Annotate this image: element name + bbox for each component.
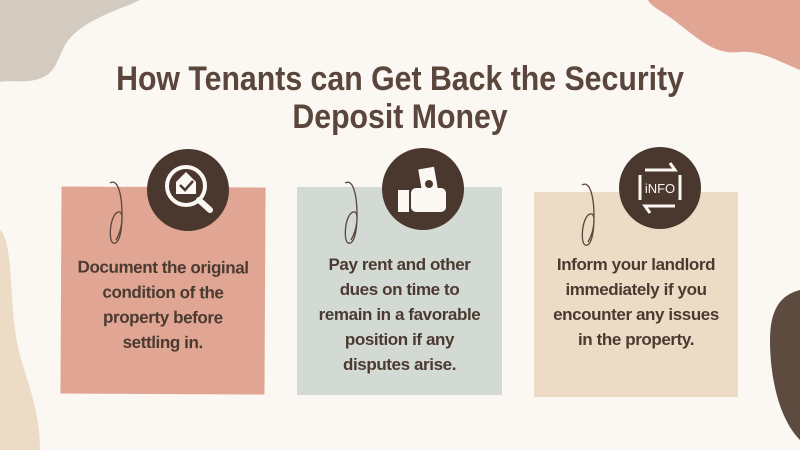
text: document: condition of the	[102, 283, 224, 302]
icon: house magnifier	[147, 149, 229, 231]
text: inform: in the property.	[578, 330, 694, 349]
blob: left beige	[0, 230, 40, 450]
title: Deposit Money	[292, 98, 508, 136]
title: How Tenants can Get Back the Security	[116, 60, 684, 98]
squiggle 1	[110, 182, 122, 243]
squiggle 3	[582, 184, 594, 245]
text: pay rent: disputes arise.	[343, 355, 456, 374]
blob: top-left grey	[0, 0, 140, 82]
icon: hand with money	[382, 148, 464, 230]
text: document: settling in.	[123, 333, 203, 352]
text: inform	[553, 255, 719, 349]
squiggle 2	[345, 182, 357, 243]
text: inform: Inform your landlord	[557, 255, 715, 274]
text: document: property before	[103, 308, 223, 327]
panel: document	[60, 186, 266, 395]
text: pay rent: remain in a favorable	[319, 305, 480, 324]
text: document: Document the original	[78, 258, 249, 277]
panel: pay rent	[297, 187, 502, 395]
blob: top-right pink	[648, 0, 800, 70]
icon: info cycle	[619, 147, 701, 229]
text: pay rent: Pay rent and other	[328, 255, 471, 274]
blob: bottom-right brown	[770, 290, 800, 440]
title	[116, 60, 684, 136]
text: inform: encounter any issues	[553, 305, 719, 324]
text: document	[78, 258, 249, 352]
icon: info cycle: iNFO	[645, 181, 675, 196]
text: pay rent: position if any	[345, 330, 454, 349]
text: pay rent	[319, 255, 480, 374]
panel: inform	[534, 192, 738, 397]
text: pay rent: dues on time to	[340, 280, 459, 299]
text: inform: immediately if you	[565, 280, 707, 299]
